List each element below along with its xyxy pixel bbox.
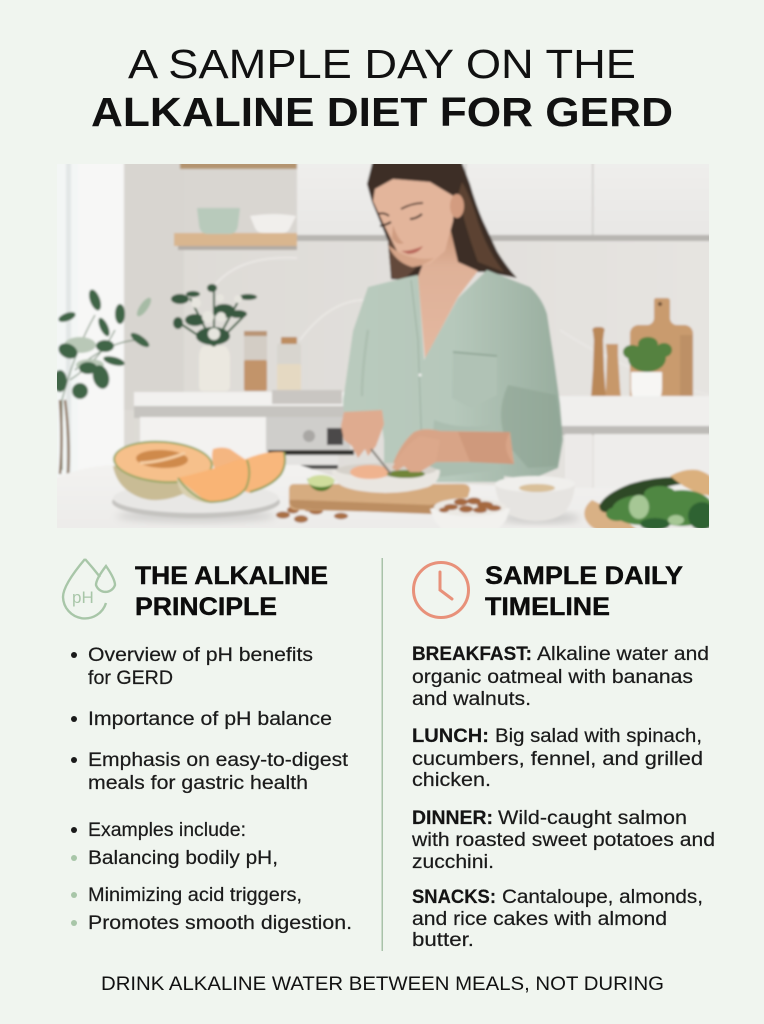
bowls on shelf: [197, 208, 240, 234]
woman arms and hands: [393, 428, 515, 464]
oat bowl: [496, 488, 574, 521]
timeline: snacks: SNACKS:: [412, 887, 496, 908]
title: ALKALINE DIET FOR GERD: [91, 89, 673, 135]
timeline: lunch: LUNCH:: [412, 726, 489, 747]
almonds on counter: [276, 506, 348, 523]
timeline: breakfast: and walnuts.: [412, 689, 531, 710]
bullet list: principle: Minimizing acid triggers,: [88, 885, 302, 906]
timeline: snacks: [412, 887, 703, 951]
marble veins: [219, 264, 247, 280]
bullet list: principle: [71, 645, 352, 934]
bullet list: principle: meals for gastric health: [88, 773, 308, 794]
timeline: dinner: Wild-caught salmon: [498, 808, 687, 829]
food plate: [332, 464, 440, 493]
upper cabinets: [297, 160, 717, 235]
timeline: dinner: with roasted sweet potatoes and: [411, 830, 715, 851]
panel: sample daily timeline: [414, 562, 683, 618]
cutting board: [630, 298, 693, 398]
front counter: [50, 465, 717, 532]
icon: pH water drops: [63, 559, 115, 618]
timeline: dinner: [411, 808, 715, 873]
cutting board with lime: [289, 484, 470, 513]
jars: [244, 336, 267, 361]
timeline: snacks: and rice cakes with almond: [412, 909, 667, 930]
heading line 2: TIMELINE: [485, 593, 610, 621]
bullet list: principle: Importance of pH balance: [88, 709, 332, 730]
cantaloupe half: [112, 464, 184, 502]
timeline: dinner: zucchini.: [412, 852, 494, 873]
almond bowl: [428, 506, 509, 523]
back counter: [134, 392, 374, 406]
peppermills: [591, 327, 606, 398]
photo: woman preparing food in a kitchen: [50, 160, 717, 532]
melon plate: [112, 499, 280, 518]
timeline: breakfast: organic oatmeal with bananas: [412, 667, 693, 688]
bullet list: principle: Emphasis on easy-to-digest: [88, 750, 349, 771]
icon: pH water drops: pH: [72, 588, 94, 607]
cantaloupe wedges: [210, 446, 246, 470]
potted herb: [631, 372, 662, 402]
lower cabinets: [140, 416, 266, 460]
flower foliage: [178, 290, 245, 346]
woman face: [373, 179, 455, 267]
timeline: breakfast: Alkaline water and: [537, 644, 709, 665]
heading: sample daily timeline: SAMPLE DAILY: [485, 562, 683, 590]
woman neck: [418, 228, 478, 359]
vegetable board: [583, 499, 637, 528]
title: [91, 41, 673, 135]
timeline: lunch: cucumbers, fennel, and grilled: [412, 749, 703, 770]
heading line 2: PRINCIPLE: [135, 593, 277, 621]
bullet list: principle: Promotes smooth digestion.: [88, 913, 352, 934]
timeline: lunch: Big salad with spinach,: [495, 726, 702, 747]
icon: clock: [414, 562, 468, 618]
timeline: breakfast: [412, 644, 709, 710]
woman shirt: [343, 270, 563, 482]
shelves: [178, 164, 298, 170]
woman hair: [367, 160, 517, 280]
flower vase: [199, 346, 230, 391]
timeline: snacks: butter.: [412, 930, 474, 951]
timeline: snacks: Cantaloupe, almonds,: [502, 887, 703, 908]
footer tip: DRINK ALKALINE WATER BETWEEN MEALS, NOT DURING: [101, 974, 664, 995]
bullet list: principle: for GERD: [88, 668, 173, 689]
heading: the alkaline principle: THE ALKALINE: [135, 562, 328, 590]
timeline: breakfast: BREAKFAST:: [412, 644, 532, 665]
timeline: lunch: [412, 726, 703, 791]
title: A SAMPLE DAY ON THE: [128, 41, 636, 87]
window and left wall: [57, 164, 79, 478]
bullet list: principle: Examples include:: [88, 820, 246, 841]
timeline: dinner: DINNER:: [412, 808, 493, 829]
cast shadows on counter: [116, 510, 276, 522]
oven: [266, 417, 350, 451]
timeline: lunch: chicken.: [412, 770, 491, 791]
right hand fingers: [392, 461, 436, 474]
panel: the alkaline principle: [63, 559, 328, 618]
bullet list: principle: Balancing bodily pH,: [88, 848, 278, 869]
left plant: [62, 315, 140, 470]
bullet list: principle: Overview of pH benefits: [88, 645, 313, 666]
